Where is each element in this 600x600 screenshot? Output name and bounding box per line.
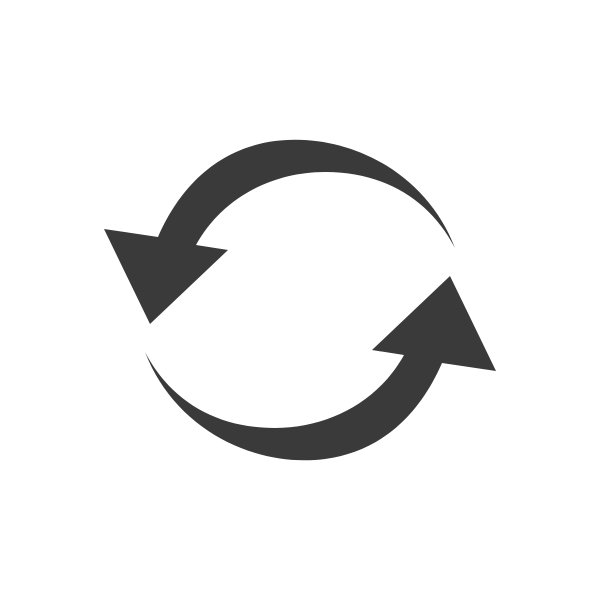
arrow: bottom curved arrow pointing right-up (145, 276, 496, 460)
arrow: top curved arrow pointing left-down (104, 140, 455, 324)
